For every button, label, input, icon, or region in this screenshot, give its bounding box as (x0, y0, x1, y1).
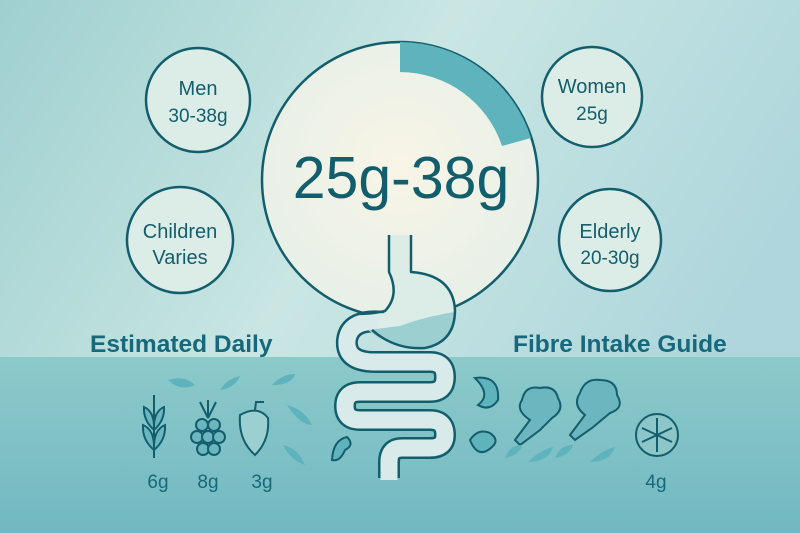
circle: men (146, 48, 250, 152)
circle: men: 30-38g (168, 106, 228, 127)
stomach (378, 235, 455, 348)
broccoli 1 (515, 387, 560, 445)
digestive system (345, 235, 455, 480)
circle: women: Women (558, 76, 626, 98)
beans (168, 378, 195, 388)
circle: children (127, 187, 233, 293)
raspberry (191, 400, 225, 455)
circle: children: Children (143, 221, 217, 243)
big circle (262, 42, 538, 318)
circle: men: Men (179, 78, 217, 100)
strawberry (240, 402, 268, 455)
circle: women (542, 47, 642, 147)
circle: children: Varies (152, 247, 208, 269)
heading right: Fibre Intake Guide (513, 331, 727, 358)
main value: 25g-38g (293, 145, 509, 211)
circle: elderly: 20-30g (580, 248, 640, 269)
citrus (636, 414, 678, 456)
wheat (143, 395, 165, 458)
circle: elderly (559, 189, 661, 291)
fibre amounts: 8g (197, 472, 219, 493)
progress arc (400, 42, 531, 146)
food icons (143, 374, 678, 465)
fibre amounts: 3g (251, 472, 273, 493)
heading left: Estimated Daily (90, 331, 273, 358)
fibre amounts: 4g (645, 472, 667, 493)
fibre amounts: 6g (147, 472, 169, 493)
circle: elderly: Elderly (579, 221, 641, 243)
fibre amounts (147, 472, 667, 493)
circle: women: 25g (576, 104, 608, 125)
broccoli 2 (570, 380, 620, 440)
